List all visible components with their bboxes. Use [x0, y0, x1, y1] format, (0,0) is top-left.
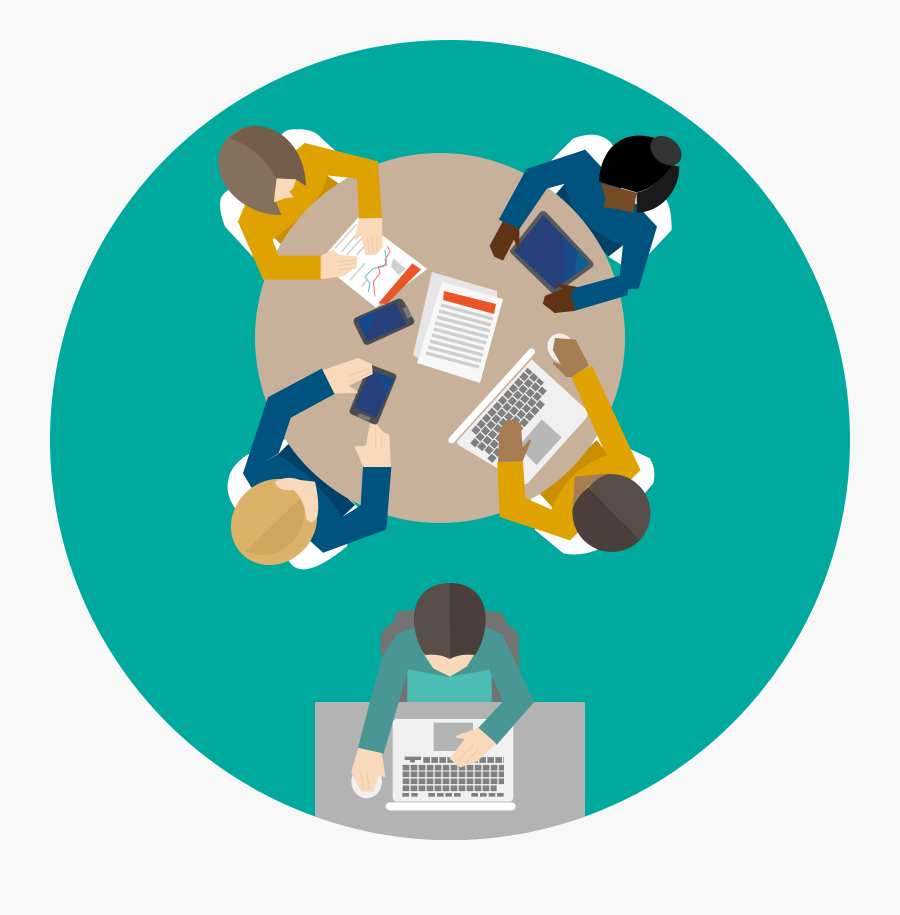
- hair shadow: [572, 487, 640, 552]
- desk person group: [380, 610, 519, 703]
- mouse: [351, 765, 382, 798]
- mouse on table: [542, 329, 580, 367]
- tablet on table: [510, 211, 594, 294]
- chest: [397, 627, 503, 677]
- left hand: [322, 251, 356, 278]
- teal circle: [50, 40, 850, 840]
- laptop trackpad: [518, 419, 562, 465]
- smartphone held by man: [349, 364, 396, 424]
- left hand fingers: [360, 770, 369, 788]
- mouse hand: [554, 339, 588, 376]
- desk: [315, 702, 585, 842]
- face: [274, 178, 296, 202]
- keyboard hand: [499, 420, 530, 461]
- orange header: [443, 291, 496, 314]
- right hand fingers: [458, 745, 478, 763]
- document: chart report: [323, 217, 427, 307]
- hair: [588, 474, 650, 540]
- laptop hinge bar: [452, 352, 532, 440]
- lower arm: [238, 203, 322, 279]
- chair: [380, 610, 519, 703]
- laptop trackpad: [434, 723, 473, 751]
- phone hand fingers: [348, 368, 370, 382]
- lower arm: [568, 227, 657, 311]
- report red line: [373, 246, 390, 297]
- hair right: [450, 583, 486, 659]
- report text lines: [335, 224, 377, 287]
- lower arm: [498, 462, 570, 540]
- upper arm: [243, 369, 335, 473]
- keyboard bottom row: [402, 793, 504, 797]
- report grey box: [391, 258, 406, 275]
- laptop keyboard: [403, 760, 504, 788]
- table laptop: [452, 352, 588, 484]
- right hand: [451, 729, 495, 766]
- report blue line: [365, 250, 387, 292]
- person: bottom-right man arms and head: [498, 339, 650, 552]
- upper arm: [293, 143, 382, 219]
- forehead: [275, 478, 318, 522]
- laptop keyboard: [467, 370, 553, 461]
- phone hand: [324, 359, 372, 393]
- right sleeve: [478, 634, 534, 744]
- left sleeve: [358, 632, 410, 753]
- report orange bar: [378, 263, 421, 304]
- desk person upper: [351, 583, 534, 810]
- hair bun: [645, 130, 687, 172]
- person: bottom-right man body and chair: [530, 433, 654, 554]
- person: top-right woman arms and head: [491, 130, 687, 312]
- laptop base: [393, 719, 513, 802]
- hair back: [637, 165, 679, 213]
- hair left: [414, 583, 450, 659]
- round table: [255, 153, 625, 523]
- laptop front bar: [386, 802, 516, 810]
- upper arm: [499, 150, 600, 230]
- hair shadow: [230, 126, 306, 186]
- face: [423, 653, 475, 677]
- person: top-left woman arms and head: [218, 126, 382, 279]
- face: [573, 473, 610, 507]
- person: top-right woman body and chair: [547, 135, 672, 265]
- left hand fingers: [338, 260, 355, 270]
- back page: [413, 272, 497, 364]
- shirt: [407, 669, 492, 702]
- upper arm: [572, 366, 640, 470]
- hand on tablet top: [491, 222, 518, 259]
- phone on table: [354, 299, 414, 345]
- text lines: [426, 305, 493, 367]
- face: [601, 183, 637, 213]
- front page: [417, 282, 503, 383]
- stacked document with orange header: [413, 272, 503, 383]
- open hand: [356, 425, 390, 466]
- left hand: [352, 749, 384, 791]
- keyboard top-left keys: [405, 757, 421, 762]
- person: bottom-left man body and chair: [227, 438, 357, 569]
- right hand: [356, 219, 382, 254]
- lower arm: [307, 467, 391, 552]
- open hand fingers: [375, 428, 382, 450]
- person: bottom-left man arms and head: [213, 359, 391, 583]
- hair: [599, 136, 673, 192]
- hand on tablet bottom: [544, 285, 576, 312]
- person: top-left woman body and chair: [220, 129, 350, 257]
- illustration: team meeting seen from above: [50, 40, 850, 840]
- hair shadow: [245, 497, 304, 555]
- hair: [213, 461, 335, 583]
- hair: [218, 126, 306, 215]
- right hand fingers: [367, 237, 377, 253]
